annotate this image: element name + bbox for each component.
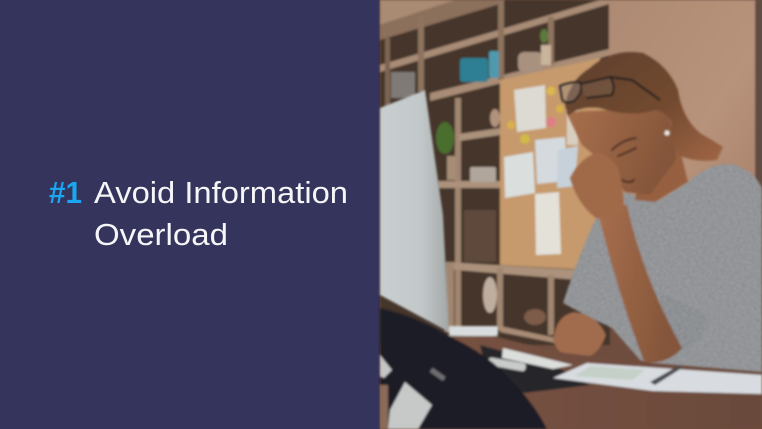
- wood wall and shelving: [380, 0, 762, 345]
- notebook: [553, 363, 762, 394]
- heading line 2: Overload: [94, 217, 228, 252]
- earring: [664, 130, 670, 136]
- pinned notes: [514, 85, 546, 132]
- sweater: [563, 164, 762, 374]
- small paper: [449, 326, 498, 336]
- forearm: [596, 205, 682, 364]
- heading: #1 Avoid Information Overload: [49, 175, 348, 252]
- rolled sleeve: [660, 292, 710, 351]
- woman at desk: [553, 52, 762, 374]
- heading line 1: Avoid Information: [94, 175, 348, 210]
- desk mat: [480, 345, 590, 393]
- pen: [488, 357, 526, 372]
- shelf items: [460, 58, 488, 82]
- face: [566, 108, 676, 195]
- desk and objects: [380, 90, 762, 429]
- monitor: [380, 90, 449, 332]
- raised hand: [570, 152, 624, 218]
- scene base: [380, 0, 762, 429]
- neck: [635, 150, 688, 202]
- panel: navy title background: [0, 0, 380, 429]
- keyboard: [502, 348, 573, 369]
- desk surface: [380, 335, 762, 429]
- panel: office photo scene: [380, 0, 762, 429]
- hair: [565, 52, 723, 161]
- facial shadows: [612, 138, 636, 182]
- cork board: [500, 58, 612, 270]
- phone keys: [380, 355, 392, 378]
- heading number: #1: [49, 175, 82, 210]
- phone: [380, 308, 547, 429]
- resting fist: [553, 312, 606, 361]
- glasses: [560, 77, 660, 102]
